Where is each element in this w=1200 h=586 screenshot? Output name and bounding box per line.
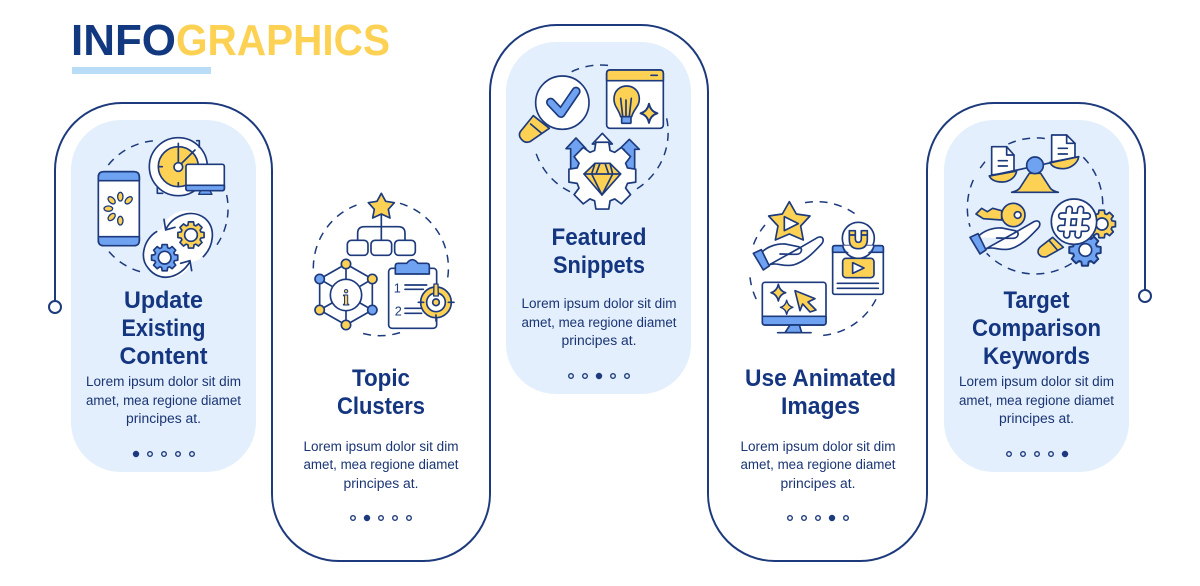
heading: Use Animated	[745, 365, 896, 392]
heading: Snippets	[553, 252, 645, 279]
panel: featured snippets	[519, 65, 677, 378]
body text: Lorem ipsum dolor sit dim	[740, 439, 896, 454]
pagination dots	[1007, 452, 1068, 456]
icon: star video hand monitor	[750, 202, 883, 336]
icon: hierarchy network and clipboard: i	[343, 285, 349, 310]
pagination dots	[134, 452, 194, 456]
heading: Update	[124, 287, 203, 314]
heading	[972, 287, 1101, 370]
icon: hierarchy network and clipboard	[313, 193, 454, 336]
body text: amet, mea regione diamet	[959, 393, 1114, 408]
heading	[120, 287, 208, 370]
heading: Clusters	[337, 393, 425, 420]
heading	[745, 365, 896, 420]
heading: Content	[120, 343, 208, 370]
body text	[304, 439, 459, 491]
body text: principes at.	[999, 411, 1074, 426]
panel: update existing content	[86, 138, 241, 456]
panel: use animated images	[740, 202, 896, 520]
panel: target comparison keywords	[959, 135, 1115, 456]
body text: Lorem ipsum dolor sit dim	[959, 374, 1114, 389]
icon: hierarchy network and clipboard: 1	[394, 282, 401, 296]
body text: amet, mea regione diamet	[740, 457, 896, 472]
body text	[86, 374, 241, 426]
icon: hierarchy network and clipboard: 2	[395, 305, 402, 319]
body text: amet, mea regione diamet	[522, 315, 677, 330]
panel: pale card backgrounds	[71, 42, 1129, 472]
body text: Lorem ipsum dolor sit dim	[522, 296, 676, 311]
title: GRAPHICS	[176, 16, 390, 65]
heading: Comparison	[972, 315, 1101, 342]
heading: Existing	[122, 315, 206, 342]
pagination dots	[569, 374, 629, 378]
body text: Lorem ipsum dolor sit dim	[304, 439, 458, 454]
body text	[740, 439, 896, 491]
body text: Lorem ipsum dolor sit dim	[86, 374, 241, 389]
icon: phone clock and gears	[98, 138, 228, 278]
icon: scales key hand hashtag	[967, 135, 1115, 274]
icon: magnifier bulb window and gem gear	[519, 65, 668, 209]
body text: principes at.	[126, 411, 201, 426]
panel: topic clusters	[304, 193, 459, 520]
heading: Images	[781, 393, 860, 420]
title underline	[72, 67, 211, 74]
body text	[522, 296, 677, 348]
heading: Featured	[552, 224, 646, 251]
body text: principes at.	[562, 333, 636, 348]
title: INFO	[71, 16, 176, 65]
body text: amet, mea regione diamet	[86, 393, 241, 408]
heading	[337, 365, 425, 420]
pagination dots	[351, 516, 411, 520]
pagination dots	[788, 516, 848, 520]
body text	[959, 374, 1114, 426]
heading	[552, 224, 646, 279]
title	[71, 16, 390, 65]
heading: Topic	[352, 365, 410, 392]
body text: principes at.	[344, 476, 418, 491]
heading: Target	[1004, 287, 1070, 314]
body text: amet, mea regione diamet	[304, 457, 459, 472]
body text: principes at.	[780, 476, 856, 491]
heading: Keywords	[983, 343, 1090, 370]
